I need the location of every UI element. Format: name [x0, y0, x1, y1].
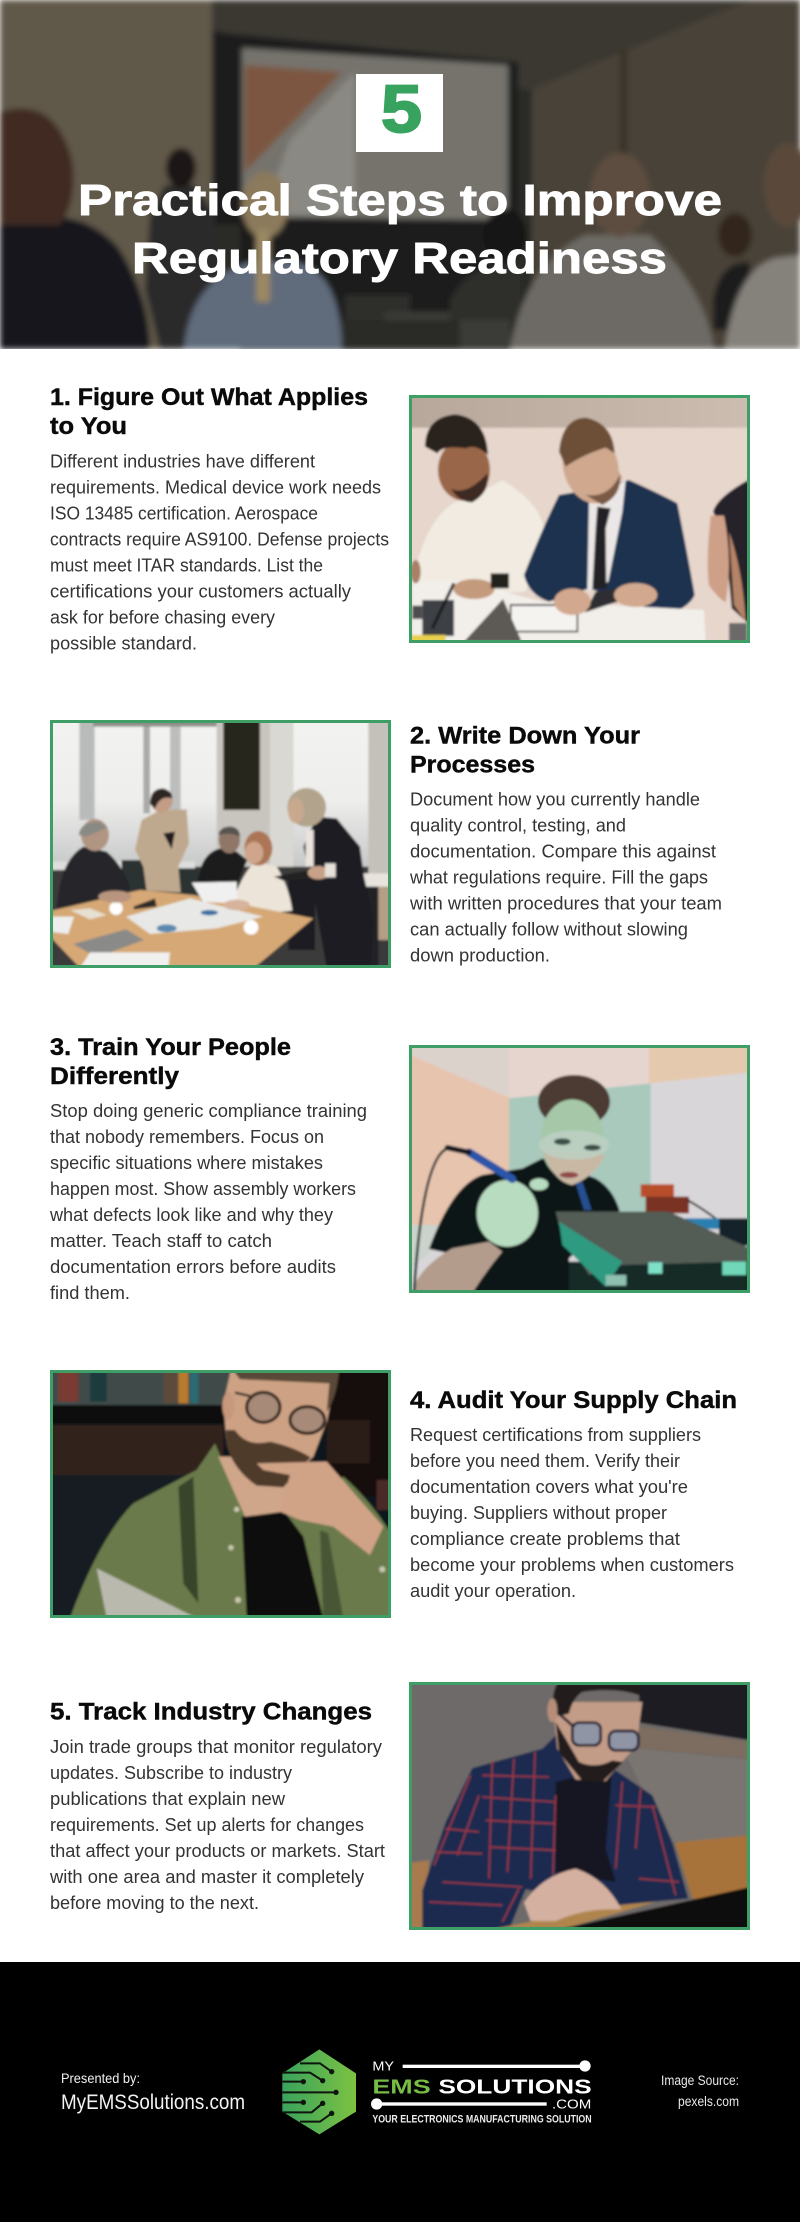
- step 1 body: Different industries have different: [50, 452, 315, 472]
- step 1 photo: two men reviewing documents: [402, 388, 757, 650]
- left person: [0, 217, 150, 349]
- step 4 body: Request certifications from suppliers: [410, 1425, 701, 1445]
- footer: [0, 1962, 800, 2222]
- step 3 body: what defects look like and why they: [49, 1205, 333, 1225]
- image source: pexels.com: [678, 2094, 739, 2109]
- step 3 body: find them.: [50, 1283, 130, 1303]
- step 1 body: must meet ITAR standards. List the: [50, 556, 323, 576]
- step 2 heading: 2. Write Down Your: [410, 722, 640, 750]
- presented by: Presented by:: [61, 2070, 140, 2086]
- logo: [282, 2049, 592, 2134]
- step 5 body: before moving to the next.: [50, 1893, 259, 1913]
- step 5 text: [49, 1698, 385, 1913]
- logo wordmark: MY: [372, 2059, 394, 2074]
- step 5 body: publications that explain new: [50, 1789, 286, 1809]
- presenter: [145, 185, 215, 349]
- title: Practical Steps to Improve: [78, 176, 722, 225]
- step 3 heading: Differently: [50, 1063, 179, 1090]
- blonde woman: [184, 262, 342, 349]
- step 5 photo: man in plaid shirt at laptop: [402, 1675, 757, 1937]
- logo wordmark: YOUR ELECTRONICS MANUFACTURING SOLUTION: [372, 2114, 592, 2126]
- logo wordmark: [371, 2059, 592, 2126]
- seated woman centre: [483, 209, 527, 261]
- step 4 body: audit your operation.: [410, 1581, 576, 1601]
- step 3 body: matter. Teach staff to catch: [50, 1231, 272, 1251]
- step 4 heading: 4. Audit Your Supply Chain: [410, 1387, 737, 1414]
- logo wordmark: .COM: [552, 2098, 591, 2112]
- step 2 body: Document how you currently handle: [410, 790, 700, 810]
- step 1 body: certifications your customers actually: [50, 582, 351, 602]
- step 5 body: [49, 1737, 385, 1913]
- step 1 text: [50, 384, 389, 654]
- step 3 body: [49, 1101, 367, 1303]
- image source: [661, 2073, 739, 2109]
- step 2 heading: [410, 722, 640, 778]
- step 5 body: updates. Subscribe to industry: [50, 1763, 292, 1783]
- step 3 body: happen most. Show assembly workers: [50, 1179, 356, 1199]
- step 3 body: Stop doing generic compliance training: [50, 1101, 367, 1121]
- far right person: [764, 143, 800, 227]
- step 4 body: compliance create problems that: [410, 1529, 680, 1549]
- step 2 body: documentation. Compare this against: [410, 842, 716, 862]
- step 2 body: with written procedures that your team: [409, 894, 722, 914]
- step 3 text: [49, 1034, 367, 1303]
- step 5 heading: 5. Track Industry Changes: [50, 1698, 372, 1726]
- step 4 body: buying. Suppliers without proper: [410, 1503, 667, 1523]
- header banner: [0, 0, 800, 350]
- presented by: MyEMSSolutions.com: [61, 2091, 245, 2114]
- step 4 body: documentation covers what you're: [410, 1477, 688, 1497]
- step 2 body: quality control, testing, and: [410, 816, 626, 836]
- step 3 body: documentation errors before audits: [50, 1257, 336, 1277]
- step 1 body: ask for before chasing every: [50, 608, 275, 628]
- title: Regulatory Readiness: [132, 234, 667, 283]
- number badge: 5: [381, 72, 422, 147]
- icon: circuit hexagon: [282, 2049, 356, 2134]
- step 3 heading: 3. Train Your People: [50, 1034, 291, 1061]
- step 4 body: become your problems when customers: [410, 1555, 734, 1575]
- image source: Image Source:: [661, 2073, 739, 2088]
- step 2 body: can actually follow without slowing: [410, 920, 688, 940]
- step 3 heading: [50, 1034, 291, 1090]
- step 1 body: possible standard.: [50, 634, 197, 654]
- step 3 photo: woman soldering circuit board: [402, 1038, 757, 1300]
- step 1 heading: 1. Figure Out What Applies: [50, 384, 368, 411]
- step 4 photo: thoughtful man with glasses: [43, 1363, 398, 1625]
- step 2 body: what regulations require. Fill the gaps: [409, 868, 708, 888]
- step 2 heading: Processes: [410, 752, 535, 778]
- step 1 heading: [50, 384, 368, 440]
- presented by: [61, 2070, 245, 2114]
- header photo: presentation room: [0, 0, 800, 350]
- step 1 body: ISO 13485 certification. Aerospace: [50, 504, 318, 524]
- step 5 body: that affect your products or markets. Start: [50, 1841, 385, 1861]
- step 2 body: down production.: [410, 946, 550, 966]
- step 2 body: [409, 790, 722, 966]
- step 1 body: contracts require AS9100. Defense projects: [50, 530, 389, 550]
- number badge: [356, 72, 443, 152]
- step 2 photo: office meeting: [43, 713, 398, 973]
- logo wordmark: SOLUTIONS: [438, 2076, 592, 2098]
- step 1 body: [50, 452, 389, 654]
- step 1 body: requirements. Medical device work needs: [50, 478, 381, 498]
- step 2 text: [409, 722, 722, 966]
- step 4 text: [410, 1387, 737, 1601]
- step 3 body: specific situations where mistakes: [50, 1153, 323, 1173]
- step 5 body: Join trade groups that monitor regulatory: [50, 1737, 382, 1757]
- right man: [510, 235, 714, 349]
- logo wordmark: EMS: [372, 2076, 431, 2098]
- step 3 body: that nobody remembers. Focus on: [50, 1127, 324, 1147]
- step 1 heading: to You: [50, 413, 127, 440]
- step 5 body: requirements. Set up alerts for changes: [50, 1815, 364, 1835]
- title: [78, 176, 722, 283]
- step 4 body: before you need them. Verify their: [410, 1451, 680, 1471]
- step 5 body: with one area and master it completely: [49, 1867, 364, 1887]
- small woman: [718, 213, 752, 257]
- step 4 body: [410, 1425, 734, 1601]
